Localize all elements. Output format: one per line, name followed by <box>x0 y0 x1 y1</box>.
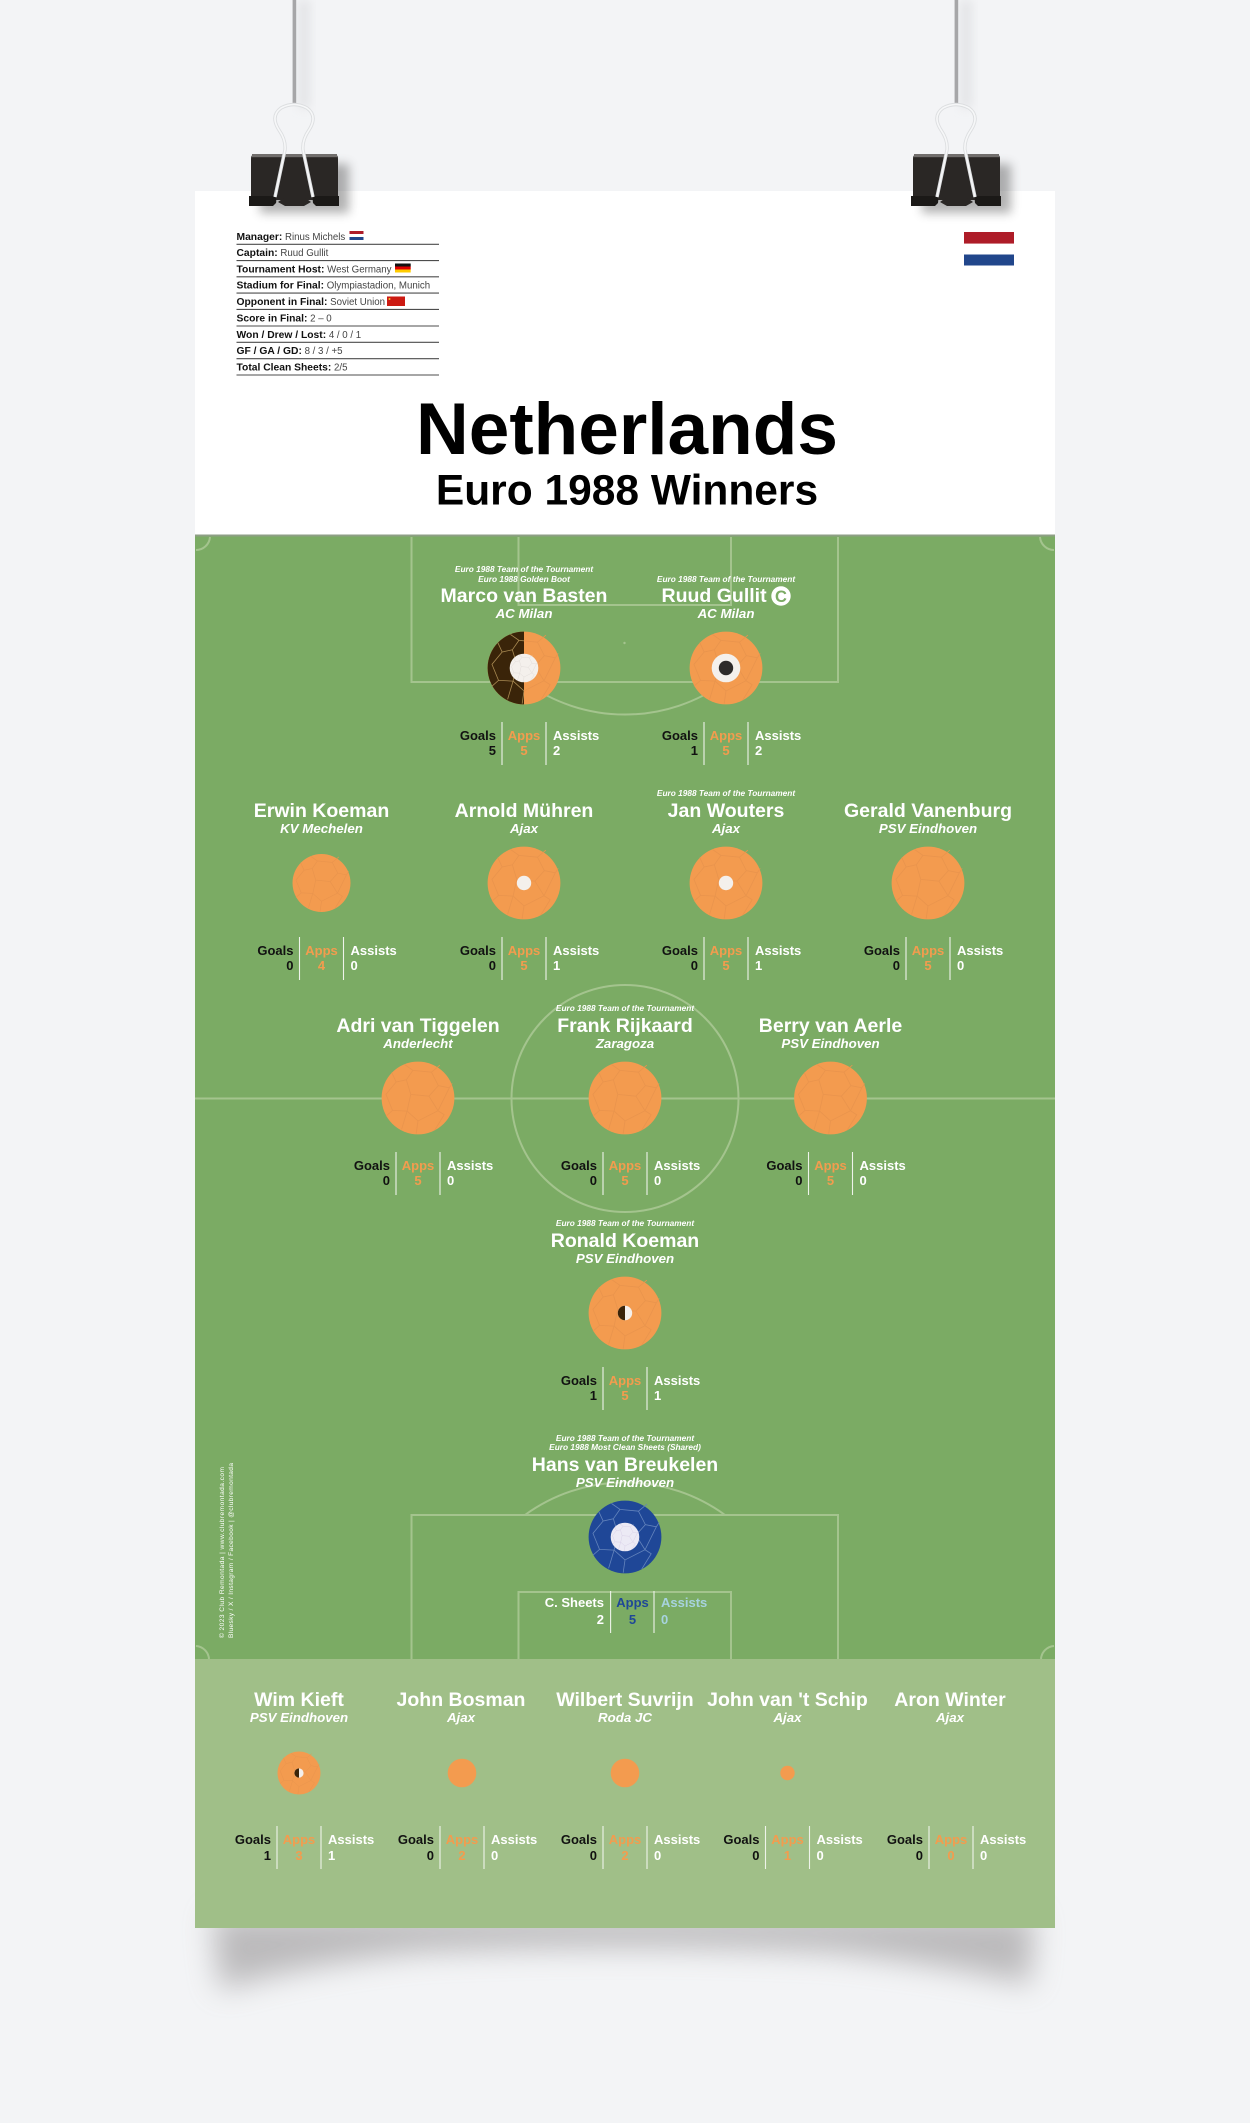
stats: Goals <box>235 1832 271 1847</box>
stats: 0 <box>916 1848 923 1863</box>
stats: 1 <box>784 1848 791 1863</box>
name: John van 't Schip <box>707 1689 868 1711</box>
stats: Assists <box>816 1832 863 1847</box>
club: PSV Eindhoven <box>250 1710 348 1725</box>
player: Jan Wouters <box>657 788 801 980</box>
stats: Goals <box>460 943 496 958</box>
ball <box>589 1277 661 1349</box>
stats: Apps <box>402 1158 434 1173</box>
stats <box>460 722 599 765</box>
substitute: Wim Kieft <box>235 1689 374 1869</box>
stats: Assists <box>491 1832 537 1847</box>
stats: Assists <box>654 1158 700 1173</box>
stats: 2 <box>621 1848 629 1863</box>
name: Frank Rijkaard <box>557 1015 693 1037</box>
name: Erwin Koeman <box>254 800 389 822</box>
small flag: Germany <box>395 264 411 272</box>
stats: 5 <box>621 1388 629 1403</box>
small flag: Netherlands <box>350 231 364 240</box>
stats: Apps <box>508 728 540 743</box>
stats: Goals <box>887 1832 923 1847</box>
stats: 0 <box>590 1848 597 1863</box>
player: Frank Rijkaard <box>556 1003 700 1195</box>
stats: 5 <box>722 958 730 973</box>
name: Ronald Koeman <box>551 1230 699 1252</box>
stats: Goals <box>398 1832 434 1847</box>
stats: 1 <box>328 1848 335 1863</box>
stats: Goals <box>561 1832 597 1847</box>
small flag: Soviet Union <box>387 296 405 306</box>
award: Euro 1988 Team of the Tournament <box>657 788 796 798</box>
substitute: John Bosman <box>397 1689 537 1869</box>
stats: Assists <box>860 1158 906 1173</box>
club: Ajax <box>509 821 539 836</box>
club: AC Milan <box>495 606 552 621</box>
stats: 0 <box>947 1848 955 1863</box>
ball <box>292 854 350 912</box>
big flag: Netherlands <box>964 232 1014 266</box>
stats <box>887 1826 1026 1869</box>
awards <box>455 564 594 584</box>
club: Ajax <box>935 1710 965 1725</box>
stats: 1 <box>590 1388 597 1403</box>
substitute: Wilbert Suvrijn <box>556 1689 700 1869</box>
poster bottom shadow <box>212 1915 1035 1990</box>
stats <box>257 937 397 980</box>
substitute: John van 't Schip <box>707 1689 868 1869</box>
ball <box>382 1062 454 1134</box>
binder clip left <box>249 104 349 213</box>
stats: 0 <box>350 958 358 973</box>
player: Arnold Mühren <box>455 800 599 980</box>
ball <box>278 1752 320 1794</box>
stats: 5 <box>520 743 528 758</box>
stats: 1 <box>755 958 762 973</box>
stats: 2 <box>597 1612 604 1627</box>
credits: © 2023 Club Remontada | www.clubremontada.com <box>218 1466 226 1638</box>
stats <box>460 937 599 980</box>
stats: Goals <box>662 943 698 958</box>
stats <box>662 722 801 765</box>
stats: 0 <box>427 1848 434 1863</box>
club: PSV Eindhoven <box>576 1251 674 1266</box>
stats: Assists <box>350 943 397 958</box>
stats: Apps <box>814 1158 847 1173</box>
stats: 0 <box>447 1173 454 1188</box>
ball <box>690 847 762 919</box>
stats: Goals <box>460 728 496 743</box>
tournament facts table: Opponent in Final: Soviet Union <box>236 297 385 308</box>
club: PSV Eindhoven <box>576 1475 674 1490</box>
captain icon <box>771 586 791 606</box>
ball <box>611 1759 639 1787</box>
binder clip right <box>911 104 1011 213</box>
stats: Apps <box>283 1832 315 1847</box>
tournament facts table: Captain: Ruud Gullit <box>236 248 329 259</box>
stats <box>561 1152 700 1195</box>
stats: Goals <box>257 943 294 958</box>
stats: 5 <box>621 1173 629 1188</box>
stats: 5 <box>414 1173 422 1188</box>
name: Berry van Aerle <box>759 1015 902 1037</box>
stats: 0 <box>691 958 698 973</box>
ball <box>780 1766 795 1780</box>
stats <box>561 1367 700 1410</box>
subtitle: Euro 1988 Winners <box>436 468 818 514</box>
stats: Apps <box>710 728 742 743</box>
stats: Assists <box>654 1373 700 1388</box>
stats: 5 <box>489 743 496 758</box>
ball <box>448 1759 476 1787</box>
player: Gerald Vanenburg <box>844 800 1012 980</box>
stats: 5 <box>924 958 932 973</box>
player: Berry van Aerle <box>759 1015 906 1195</box>
stats: Assists <box>553 943 599 958</box>
club: Roda JC <box>598 1710 652 1725</box>
tournament facts table: Score in Final: 2 – 0 <box>236 314 332 324</box>
credits: Bluesky / X / Instagram / Facebook | @clubremontada <box>228 1463 235 1638</box>
award: Euro 1988 Team of the Tournament <box>657 574 796 584</box>
stats: Goals <box>723 1832 760 1847</box>
stats: Apps <box>508 943 540 958</box>
club: Zaragoza <box>595 1036 654 1051</box>
player: Ruud Gullit <box>657 574 801 765</box>
stats: Goals <box>354 1158 390 1173</box>
stats: 0 <box>383 1173 390 1188</box>
name: Arnold Mühren <box>455 800 593 822</box>
name: Gerald Vanenburg <box>844 800 1012 822</box>
poster <box>195 191 1055 1928</box>
hanging string right <box>955 0 972 108</box>
club: Ajax <box>772 1710 802 1725</box>
substitute: Aron Winter <box>887 1689 1026 1869</box>
stats: Goals <box>864 943 900 958</box>
stats: 1 <box>553 958 560 973</box>
substitutes panel <box>195 1659 1055 1928</box>
name: Wilbert Suvrijn <box>556 1689 694 1711</box>
tournament facts table <box>236 232 439 375</box>
stats: 0 <box>654 1173 661 1188</box>
stats: Apps <box>912 943 944 958</box>
stats: 2 <box>553 743 560 758</box>
stats: 0 <box>491 1848 498 1863</box>
club: Ajax <box>446 1710 476 1725</box>
name: Jan Wouters <box>668 800 784 822</box>
stats: 2 <box>755 743 762 758</box>
stats: 5 <box>722 743 730 758</box>
name: Marco van Basten <box>441 585 607 607</box>
awards: Euro 1988 Golden Boot <box>478 574 571 584</box>
award: Euro 1988 Team of the Tournament <box>556 1218 695 1228</box>
ball: goals, apps, assists <box>488 632 560 704</box>
ball <box>794 1062 867 1134</box>
stats: Assists <box>755 728 801 743</box>
ball <box>589 1062 661 1134</box>
stats: Goals <box>561 1373 597 1388</box>
stats: Assists <box>447 1158 493 1173</box>
stats: Goals <box>561 1158 597 1173</box>
stats <box>545 1591 707 1633</box>
stats <box>662 937 801 980</box>
stats: Apps <box>616 1595 649 1610</box>
stats: Apps <box>305 943 338 958</box>
stats: Goals <box>766 1158 802 1173</box>
name: Hans van Breukelen <box>532 1454 718 1476</box>
stats: Apps <box>710 943 742 958</box>
stats: 3 <box>295 1848 303 1863</box>
stats: 0 <box>860 1173 867 1188</box>
ball: goals, apps, assists <box>690 632 762 704</box>
name: Aron Winter <box>894 1689 1006 1711</box>
awards <box>549 1433 701 1452</box>
stats: 0 <box>816 1848 824 1863</box>
stats <box>561 1826 700 1869</box>
player: Ronald Koeman <box>551 1218 700 1410</box>
stats: 0 <box>590 1173 597 1188</box>
captain icon: C <box>775 588 787 606</box>
stats: 0 <box>893 958 900 973</box>
stats: Assists <box>980 1832 1026 1847</box>
tournament facts table: Won / Drew / Lost: 4 / 0 / 1 <box>236 330 361 341</box>
stats: 0 <box>957 958 964 973</box>
stats: 1 <box>691 743 698 758</box>
stats: 0 <box>286 958 294 973</box>
stats: Apps <box>935 1832 967 1847</box>
stats: Apps <box>446 1832 478 1847</box>
name: Wim Kieft <box>254 1689 344 1711</box>
stats: Assists <box>553 728 599 743</box>
title: Netherlands <box>416 389 838 470</box>
club: Ajax <box>711 821 741 836</box>
credits <box>218 1463 235 1638</box>
stats <box>235 1826 374 1869</box>
stats: Assists <box>654 1832 700 1847</box>
stats: 0 <box>752 1848 760 1863</box>
stats: 2 <box>458 1848 466 1863</box>
player: Marco van Basten <box>441 564 607 765</box>
ball <box>892 847 964 919</box>
club: PSV Eindhoven <box>781 1036 880 1051</box>
awards: Euro 1988 Team of the Tournament <box>455 564 594 574</box>
player: Erwin Koeman <box>254 800 397 980</box>
stats: Apps <box>609 1158 641 1173</box>
awards: Euro 1988 Most Clean Sheets (Shared) <box>549 1442 701 1452</box>
stats: Assists <box>755 943 801 958</box>
stats: 0 <box>489 958 496 973</box>
club: KV Mechelen <box>280 821 363 836</box>
stats: Apps <box>609 1373 641 1388</box>
ball <box>589 1501 661 1573</box>
stats: Assists <box>957 943 1003 958</box>
club: Anderlecht <box>382 1036 453 1051</box>
name: Adri van Tiggelen <box>336 1015 500 1037</box>
stats: 0 <box>795 1173 802 1188</box>
tournament facts table: Total Clean Sheets: 2/5 <box>236 362 347 374</box>
stats <box>354 1152 493 1195</box>
stats: 5 <box>827 1173 834 1188</box>
stats: 0 <box>980 1848 987 1863</box>
award: Euro 1988 Team of the Tournament <box>556 1003 695 1013</box>
stats <box>723 1826 863 1869</box>
name: John Bosman <box>397 1689 525 1711</box>
stats: 1 <box>654 1388 661 1403</box>
stats: 5 <box>629 1612 636 1627</box>
stats: 1 <box>264 1848 271 1863</box>
stats: 5 <box>520 958 528 973</box>
stats <box>864 937 1003 980</box>
stats: Assists <box>328 1832 374 1847</box>
pitch <box>195 534 1055 1660</box>
awards: Euro 1988 Team of the Tournament <box>556 1433 695 1443</box>
tournament facts table: GF / GA / GD: 8 / 3 / +5 <box>236 346 343 357</box>
player: Hans van Breukelen <box>532 1433 718 1633</box>
ball <box>488 847 560 919</box>
stats <box>766 1152 906 1195</box>
club: PSV Eindhoven <box>879 821 977 836</box>
stats: C. Sheets <box>545 1595 604 1610</box>
club: AC Milan <box>697 606 754 621</box>
stats: Goals <box>662 728 698 743</box>
stats: 4 <box>318 958 326 973</box>
stats: Assists <box>661 1595 707 1610</box>
stats <box>398 1826 537 1869</box>
hanging string left <box>293 0 310 108</box>
stats: 0 <box>654 1848 661 1863</box>
tournament facts table: Manager: Rinus Michels <box>236 232 345 243</box>
tournament facts table: Tournament Host: West Germany <box>236 264 392 276</box>
stats: 0 <box>661 1612 668 1627</box>
player: Adri van Tiggelen <box>336 1015 500 1195</box>
name: Ruud Gullit <box>662 585 767 607</box>
stats: Apps <box>609 1832 641 1847</box>
stats: Apps <box>771 1832 804 1847</box>
tournament facts table: Stadium for Final: Olympiastadion, Munich <box>236 281 430 292</box>
